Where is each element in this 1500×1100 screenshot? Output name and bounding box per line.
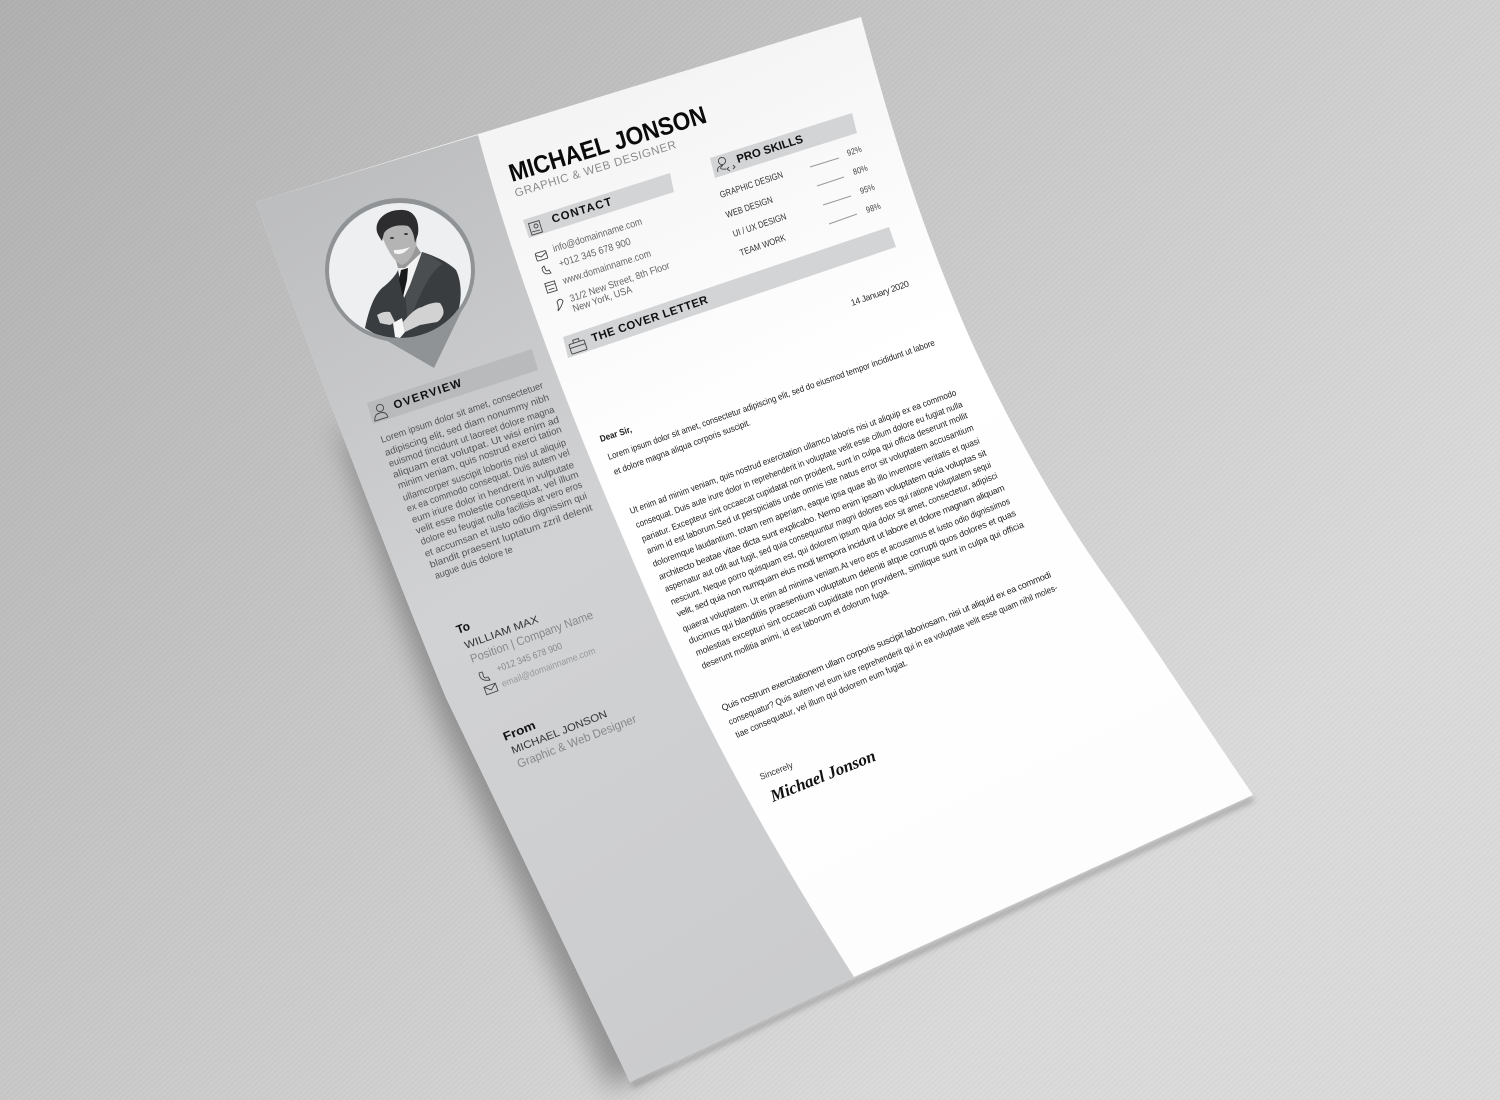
- recipient block: WILLIAM MAX: [463, 613, 540, 652]
- skills heading bar: [710, 113, 857, 178]
- sign-off: [758, 746, 878, 806]
- closing paragraph: Quis nostrum exercitationem ullam corporis suscipit laboriosam, nisi ut aliquid ex ea commodi: [720, 569, 1052, 713]
- skill percentages: 95%: [859, 182, 876, 196]
- overview paragraph: [379, 380, 594, 582]
- intro sentence: Lorem ipsum dolor sit amet, consectetur adipiscing elit, sed do eiusmod tempor incididunt ut labore: [606, 338, 936, 462]
- skill names: GRAPHIC DESIGN: [718, 170, 784, 200]
- overview paragraph: eum iriure dolor in hendrerit in vulputate: [410, 460, 576, 526]
- cover letter heading bar: [563, 227, 896, 358]
- overview paragraph: augue duis dolore te: [433, 544, 514, 582]
- contact details: info@domainname.com: [552, 217, 644, 255]
- skill names: TEAM WORK: [738, 232, 788, 258]
- letter body: [599, 338, 1059, 740]
- cover letter heading bar: THE COVER LETTER: [590, 294, 710, 345]
- main paragraph: consequat. Duis aute irure dolor in reprehenderit in voluptate velit esse cillum dolore eu fugiat nulla: [634, 399, 964, 530]
- contact heading bar: [523, 173, 674, 238]
- contact details: www.domainname.com: [561, 249, 653, 287]
- subtitle: role: GRAPHIC & WEB DESIGNER: [513, 139, 678, 200]
- main paragraph: aspernatur aut odit aut fugit, sed quia consequuntur magni dolores eos qui ratione voluptatem sequi: [663, 459, 993, 594]
- overview paragraph: velit esse molestie consequat, vel illum: [414, 469, 580, 537]
- salutation: Dear Sir,: [599, 424, 633, 444]
- overview paragraph: ex ea commodo consequat. Duis autem vel: [405, 447, 571, 515]
- recipient block: To: [454, 619, 472, 637]
- main paragraph: pariatur. Excepteur sint occaecat cupidatat non proident, sunt in culpa qui officia deserunt mollit: [640, 410, 969, 544]
- paper shadow: [335, 420, 1253, 1090]
- intro sentence: et dolore magna aliqua corporis suscipit.: [612, 417, 752, 477]
- icon: address book: [528, 221, 542, 235]
- skill names: [718, 170, 788, 258]
- skill names: UI / UX DESIGN: [731, 211, 788, 239]
- skill percentages: 92%: [846, 144, 863, 158]
- sign-off: Sincerely: [758, 760, 795, 782]
- main paragraph: molestias excepturi sint occaecati cupiditate non provident, similique sunt in culpa qui officia: [694, 520, 1025, 658]
- main paragraph: quaerat voluptatem. Ut enim ad minima veniam.At vero eos et accusamus et iusto odio dignissimos: [681, 496, 1012, 634]
- recipient block: +012 345 678 900: [495, 641, 564, 675]
- main paragraph: doloremque laudantium, totam rem aperiam, eaque ipsa quae ab illo inventore veritatis et quasi: [651, 436, 981, 569]
- main paragraph: ducimus qui blanditiis praesentium voluptatum deleniti atque corrupti quos dolores et quas: [687, 508, 1018, 646]
- contact details: +012 345 678 900: [558, 236, 633, 270]
- main paragraph: architecto beatae vitae dicta sunt explicabo. Nemo enim ipsam voluptatem quia voluptas sit: [657, 447, 988, 582]
- overview paragraph: blandit praesent luptatum zzril delenit: [428, 502, 594, 571]
- recipient block: email@domainname.com: [500, 646, 597, 690]
- contact details: New York, USA: [571, 284, 634, 315]
- paper sheet: [256, 17, 1253, 1082]
- recipient block: Position | Company Name: [468, 608, 595, 666]
- closing paragraph: consequatur? Quis autem vel eum iure reprehenderit qui in ea voluptate velit esse quam nihil moles-: [727, 582, 1059, 727]
- skill percentages: 80%: [852, 163, 869, 177]
- main paragraph: deserunt mollitia animi, id est laborum et dolorum fuga.: [700, 586, 891, 671]
- skill percentages: [846, 144, 882, 215]
- main paragraph: velit, sed quia non numquam eius modi tempora incidunt ut labore et dolore magnam aliquam: [675, 483, 1006, 619]
- overview heading bar: OVERVIEW: [392, 378, 463, 412]
- main paragraph: Ut enim ad minim veniam, quis nostrud exercitation ullamco laboris nisi ut aliquip ex ea commodo: [628, 388, 958, 516]
- date: 14 January 2020: [849, 279, 910, 308]
- overview heading bar: [367, 349, 538, 424]
- recipient block: [454, 608, 597, 695]
- overview paragraph: dolore eu feugiat nulla facilisis at vero eros: [419, 479, 584, 548]
- contact heading text: CONTACT: [550, 196, 613, 226]
- sender block: Graphic & Web Designer: [515, 712, 638, 771]
- overview paragraph: adipiscing elit, sed diam nonummy nibh: [383, 392, 551, 459]
- icon: envelope: [484, 683, 498, 695]
- profile photo pin: [325, 198, 475, 368]
- contact details: [552, 217, 672, 315]
- panel: pro skills: [710, 113, 882, 258]
- sender block: MICHAEL JONSON: [510, 708, 609, 757]
- signature: Michael Jonson: [766, 746, 878, 806]
- overview paragraph: euismod tincidunt ut laoreet dolore magna: [387, 404, 557, 470]
- overview paragraph: minim veniam, quis nostrud exerci tation: [396, 424, 563, 492]
- closing paragraph: tiae consequatur, vel illum qui dolorem eum fugiat.: [734, 658, 909, 740]
- icon: person code: [718, 157, 735, 172]
- overview paragraph: Lorem ipsum dolor sit amet, consectetuer: [379, 380, 546, 446]
- overview paragraph: et accumsan et iusto odio dignissim qui: [423, 491, 589, 560]
- title: name: MICHAEL JONSON: [506, 101, 710, 188]
- main paragraph: nesciunt. Neque porro quisquam est, qui dolorem ipsum quia dolor sit amet, consectetur, adipisci: [669, 470, 999, 607]
- panel: contact: [523, 173, 674, 315]
- contact details: 31/2 New Street, 8th Floor: [568, 260, 672, 305]
- sender block: From: [501, 718, 538, 744]
- icon: phone: [479, 672, 490, 680]
- panel: sidebar: [256, 135, 854, 1082]
- main paragraph: [628, 388, 1025, 671]
- main paragraph: anim id est laborum.Sed ut perspiciatis unde omnis iste natus error sit voluptatem accusantium: [645, 423, 975, 556]
- skill names: WEB DESIGN: [724, 195, 774, 220]
- skills heading text: PRO SKILLS: [735, 133, 805, 166]
- overview paragraph: aliquam erat volutpat. Ut wisi enim ad: [391, 415, 561, 481]
- portrait of man: [365, 210, 461, 341]
- skill bars: [810, 158, 857, 224]
- icon: person: [375, 404, 388, 421]
- icon: briefcase: [568, 337, 587, 354]
- overview paragraph: ullamcorper suscipit lobortis nisl ut aliquip: [401, 437, 568, 504]
- skill percentages: 98%: [865, 201, 882, 215]
- contact icons: [535, 250, 563, 311]
